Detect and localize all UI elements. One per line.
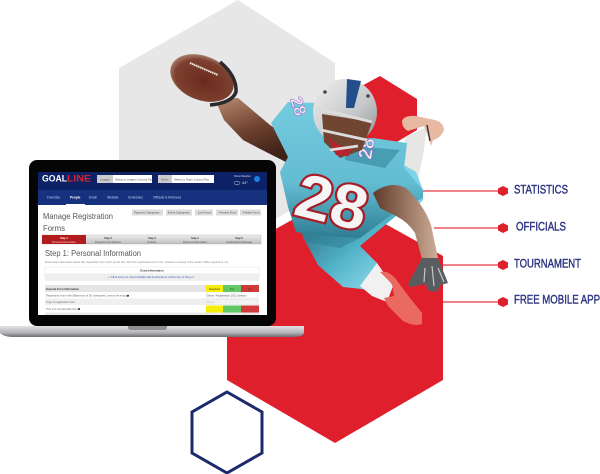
- step tabs: Step 3: [148, 236, 156, 240]
- right glove: [408, 258, 448, 292]
- step tabs: Confirmation Message: [226, 240, 253, 244]
- step tabs: Programs and Rosters: [95, 240, 122, 244]
- shoulder number right: 28: [355, 136, 380, 161]
- form table: Demo: Registration 2021 Season: [207, 294, 247, 298]
- form table: Registration form title (Maximum of 50 characters, cannot be empty): [46, 294, 128, 298]
- form table: Yes: [230, 287, 235, 291]
- site header bar: League: [100, 178, 110, 182]
- feature: officials: [434, 219, 566, 233]
- step tabs: Step 2: [104, 236, 112, 240]
- catching glove: [210, 62, 236, 105]
- action buttons: [132, 210, 261, 216]
- feature: officials: OFFICIALS: [516, 219, 566, 233]
- step heading: Step 1: Personal Information: [45, 249, 141, 258]
- extended arm: [217, 98, 292, 165]
- form table: Required: [209, 287, 220, 291]
- action buttons: Event Categories: [168, 210, 190, 214]
- step description: Enter basic information about this registration form such as the title, who this registration form is for, whether to accept online and/or offline payments, etc.: [45, 260, 229, 264]
- front leg sock: [360, 263, 393, 302]
- grey hexagon background: [119, 0, 335, 240]
- extra information box: [45, 267, 259, 280]
- action buttons: List Forms: [198, 210, 212, 214]
- jersey number large: 28: [289, 161, 375, 245]
- form table: General Form Information: [46, 287, 79, 291]
- red large hexagon: [227, 196, 443, 443]
- extra information box: + Click Here to Insert Additional Instructions at the top of Step 1: [108, 275, 194, 279]
- site navigation bar: Website: [107, 196, 119, 200]
- site navigation bar: Email: [89, 196, 97, 200]
- site header bar: Show Weather: [234, 174, 251, 178]
- extra information box: Extra Information: [140, 268, 164, 272]
- feature: tournament: [443, 256, 582, 270]
- site navigation bar: People: [70, 196, 81, 200]
- form table: No: [248, 287, 252, 291]
- site header bar: Select a Team Control Par: [174, 178, 209, 182]
- jersey torso: [271, 102, 423, 238]
- step tabs: Personal Information: [52, 240, 77, 244]
- laptop bezel: [29, 160, 276, 326]
- form table: This is a membership form: [46, 307, 78, 311]
- football: [163, 45, 241, 111]
- feature: free mobile app: [443, 293, 600, 307]
- site navigation bar: Favorites: [47, 196, 61, 200]
- laptop screen: [38, 172, 267, 315]
- connector lines and feature list: [423, 182, 600, 307]
- step tabs: [42, 235, 261, 244]
- site header bar: 44°: [242, 180, 248, 185]
- feature: statistics: STATISTICS: [514, 182, 568, 196]
- feature: tournament: TOURNAMENT: [514, 256, 582, 270]
- site navigation bar: Schedules: [128, 196, 143, 200]
- form table: [45, 285, 259, 315]
- jersey shading folds: [300, 145, 400, 248]
- page title second line: Forms: [43, 223, 65, 233]
- navy outlined hexagon: [192, 392, 262, 473]
- step tabs: Payment Information: [183, 240, 208, 244]
- front cleat: [380, 272, 422, 325]
- site navigation bar: Officials & Referees: [153, 196, 182, 200]
- step tabs: Step 1: [60, 236, 68, 240]
- shoulder number left: 28: [286, 94, 310, 118]
- form table: Type of registration form: [46, 300, 76, 304]
- football player: [163, 45, 448, 325]
- raised rear leg and cleat: [402, 116, 444, 180]
- red upper hexagon: [345, 76, 417, 152]
- action buttons: Publish Form: [243, 210, 260, 214]
- site header bar: LINE: [67, 174, 91, 184]
- laptop base: [0, 326, 304, 337]
- step tabs: Step 4: [191, 236, 199, 240]
- step tabs: Policies: [148, 240, 157, 244]
- site header bar: Select a League Control Pa: [115, 178, 152, 182]
- page title: Manage Registration: [43, 211, 113, 221]
- helmet and face: [313, 79, 377, 158]
- laptop: [0, 160, 304, 337]
- site header bar: Team: [161, 178, 169, 182]
- hind thigh: [385, 165, 423, 214]
- feature: statistics: [423, 182, 568, 196]
- step tabs: Step 5: [235, 236, 243, 240]
- site header bar: GOAL: [42, 174, 67, 184]
- form table: Player: [207, 300, 215, 304]
- site navigation bar: [38, 190, 267, 205]
- site header bar: [38, 172, 267, 190]
- front leg trousers: [296, 205, 396, 290]
- action buttons: Payment Categories: [134, 210, 160, 214]
- right arm: [373, 185, 438, 259]
- glove highlights: [424, 266, 444, 286]
- action buttons: Preview Form: [219, 210, 237, 214]
